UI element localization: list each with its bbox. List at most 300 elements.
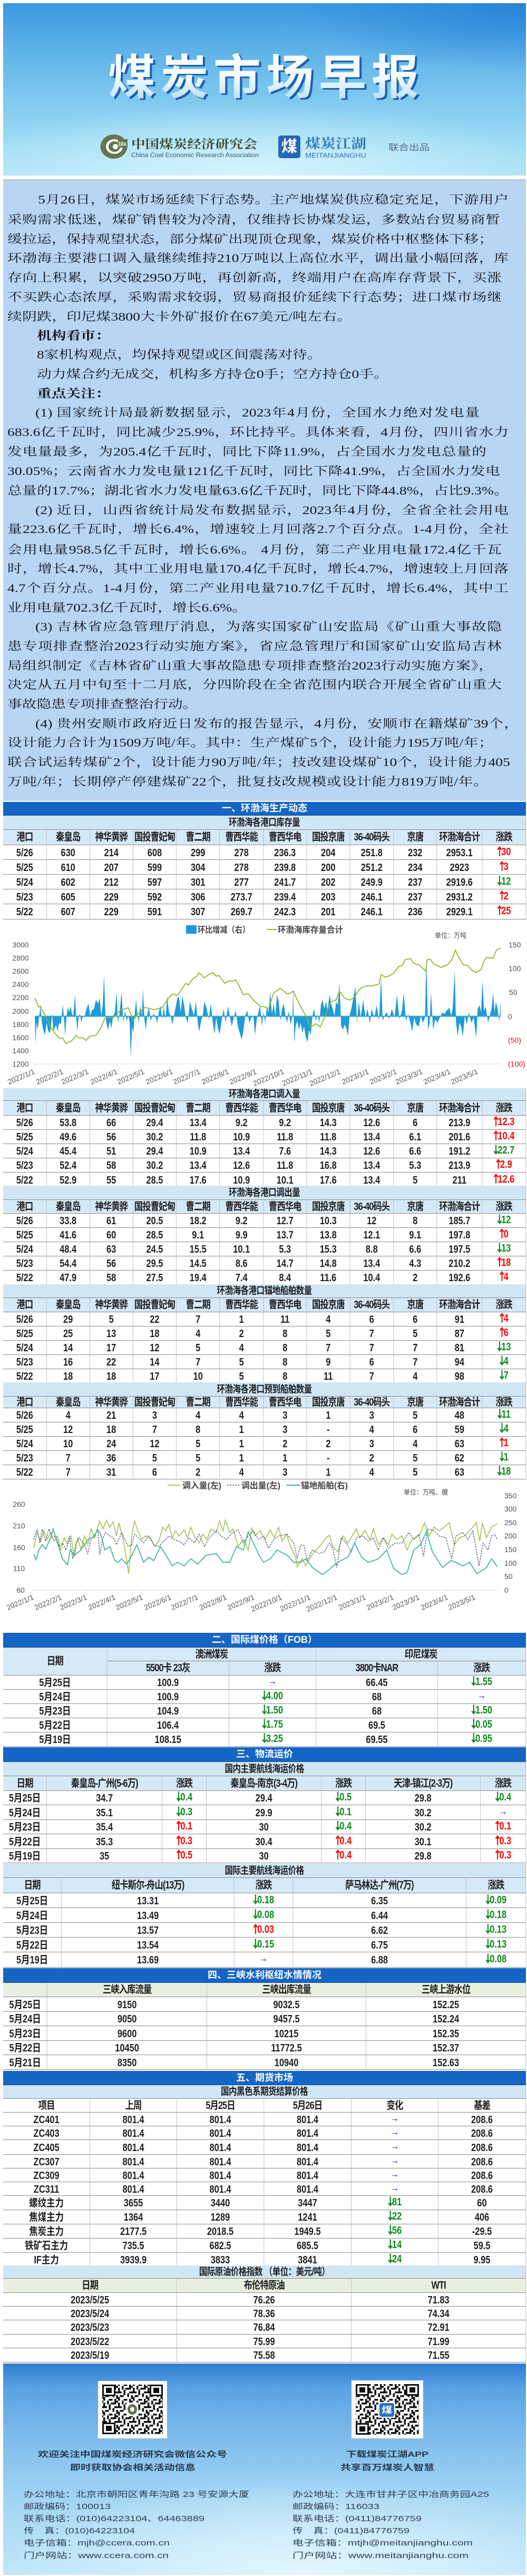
text: institutional views: 机构看市：	[37, 329, 110, 342]
table: expected vessels: 5/26	[16, 1410, 33, 1421]
table: domestic shipping rates: 0.4	[339, 1849, 352, 1861]
table: anchored vessels: 9	[326, 1357, 330, 1368]
section heading: futures market	[3, 2071, 526, 2085]
x axis date labels	[6, 1067, 479, 1088]
table: port outbound volume: 11.6	[320, 1272, 336, 1284]
table: expected vessels: 7	[152, 1424, 157, 1436]
text: association contact details: 联系电话：(010)64223104、64463889	[24, 2514, 204, 2523]
table: anchored vessels: 4	[413, 1371, 417, 1382]
table: international shipping rates: 涨跌	[256, 1880, 271, 1891]
table: port inbound volume: 11.8	[320, 1131, 336, 1143]
table: anchored vessels: 6	[504, 1327, 509, 1339]
table: port inbound volume: 13.4	[190, 1160, 207, 1171]
table: port outbound volume: 10.3	[320, 1215, 337, 1227]
table: port outbound volume: 环渤海各港口调出量	[229, 1187, 300, 1198]
table: international shipping rates: 纽卡斯尔-舟山(13万)	[112, 1880, 184, 1891]
table: anchored vessels: 16	[63, 1357, 73, 1368]
table: international crude oil prices: 76.84	[253, 2322, 275, 2333]
table: port inventory: 597	[148, 876, 162, 888]
left axis labels: 2400	[12, 980, 29, 989]
table: port inbound volume: 36-40码头	[354, 1102, 389, 1113]
table: domestic ferrous futures settlement: 3440	[211, 2197, 230, 2209]
x axis date labels: 2022/4/1	[89, 1067, 119, 1086]
table: anchored vessels: 91	[455, 1314, 464, 1325]
table: international crude oil prices: 75.58	[253, 2350, 275, 2361]
table: expected vessels: 3	[369, 1410, 374, 1421]
x axis date labels: 2023/2/1	[365, 1593, 395, 1612]
table: port outbound volume: 国投曹妃甸	[134, 1201, 175, 1213]
x axis date labels: 2022/3/1	[60, 1067, 90, 1086]
table: FOB prices: 108.15	[155, 1734, 181, 1746]
table: domestic ferrous futures settlement: 801.4	[297, 2114, 318, 2126]
table: expected vessels: 31	[106, 1467, 116, 1478]
table: anchored vessels: 14	[63, 1342, 73, 1354]
table: domestic shipping rates: 29.8	[415, 1793, 432, 1804]
table: anchored vessels: 5	[196, 1342, 200, 1354]
table: expected vessels: 神华黄骅	[95, 1397, 128, 1408]
x axis date labels: 2022/7/1	[172, 1067, 201, 1086]
table: anchored vessels: 11	[280, 1314, 289, 1325]
table: port inbound volume: 神华黄骅	[95, 1102, 128, 1113]
table: anchored vessels: 94	[455, 1357, 464, 1368]
table: international shipping rates	[3, 1864, 526, 1968]
table: port inventory: 242.3	[274, 906, 296, 918]
text: item 3	[7, 620, 502, 711]
table: expected vessels: 12	[150, 1438, 160, 1450]
table: Three Gorges flow and water level: 5月22日	[9, 2042, 41, 2054]
table: international shipping rates: 0.18	[490, 1909, 506, 1920]
table: port outbound volume: 曹西华能	[225, 1201, 258, 1213]
table: domestic ferrous futures settlement: ZC307	[33, 2156, 60, 2168]
table: domestic ferrous futures settlement: IF主力	[34, 2254, 59, 2266]
table: domestic ferrous futures settlement: 国内黑色系期货结算价格	[221, 2086, 308, 2097]
table: domestic ferrous futures settlement: 682.5	[209, 2240, 231, 2252]
table: port outbound volume: 9.1	[409, 1229, 421, 1241]
table: domestic shipping rates: 35.4	[96, 1822, 113, 1833]
table: port inventory: 241.7	[274, 876, 296, 888]
table: port outbound volume: 60	[106, 1229, 116, 1241]
table: port inbound volume: 5.3	[409, 1160, 421, 1171]
table: anchored vessels: 7	[196, 1314, 200, 1325]
table: international shipping rates: 0.13	[490, 1938, 506, 1950]
table: port inventory: 京唐	[407, 831, 423, 843]
table: port inbound volume: 5/26	[16, 1117, 33, 1129]
table: port outbound volume: 5/23	[16, 1258, 33, 1270]
table: port inbound volume: 211	[453, 1175, 466, 1186]
table: FOB prices: 1.75	[266, 1719, 283, 1730]
left axis labels: 160	[13, 1543, 25, 1552]
table: domestic ferrous futures settlement: ZC401	[33, 2114, 60, 2126]
text: item 2: 业用电量702.3亿千瓦时，增长6.6%。	[7, 601, 247, 614]
right axis labels: 200	[504, 1532, 517, 1540]
table: port outbound volume: 14.8	[320, 1258, 337, 1270]
right axis labels	[508, 941, 525, 1068]
table: international shipping rates: 13.31	[137, 1895, 159, 1906]
table: domestic shipping rates: 0.3	[180, 1835, 192, 1846]
table: port outbound volume: 5.3	[279, 1244, 291, 1255]
table: domestic ferrous futures settlement: 801.4	[209, 2114, 231, 2126]
table: port inbound volume: 53.8	[60, 1117, 76, 1129]
text: market summary: 续阴跌，印尼煤3800大卡外矿报价在67美元/吨左右。	[7, 310, 352, 323]
table: port inbound volume: 191.2	[448, 1146, 470, 1157]
left axis labels: 2800	[12, 954, 29, 962]
table: international crude oil prices: 74.34	[428, 2308, 450, 2320]
section heading: Three Gorges water conditions: 四、三峡水利枢纽水情情况	[208, 1970, 321, 1980]
table: domestic ferrous futures settlement: 801.4	[297, 2156, 318, 2168]
table: port inbound volume: 51	[106, 1146, 116, 1157]
table: expected vessels: 4	[369, 1467, 374, 1478]
table: expected vessels: 港口	[16, 1397, 33, 1408]
x axis date labels: 2022/12/1	[308, 1067, 341, 1088]
table: anchored vessels: 国投京唐	[312, 1299, 345, 1311]
text: item 1	[7, 406, 509, 497]
table: port outbound volume: 12.1	[363, 1229, 380, 1241]
text: Meitan Jianghu contact details	[292, 2490, 489, 2560]
x axis date labels: 2023/3/1	[394, 1067, 424, 1086]
section heading: futures market: 五、期货市场	[236, 2073, 293, 2083]
table: domestic shipping rates: 0.3	[499, 1849, 511, 1861]
table: anchored vessels: 6	[413, 1314, 417, 1325]
table: port inbound volume: 29.4	[146, 1117, 163, 1129]
table: domestic ferrous futures settlement: 208.6	[471, 2128, 493, 2139]
table: port inbound volume: 55	[106, 1175, 116, 1186]
table: anchored vessels: 8	[282, 1357, 287, 1368]
table: domestic shipping rates: 34.7	[96, 1793, 113, 1804]
table: port inbound volume: 11.8	[277, 1131, 293, 1143]
table: port outbound volume: 197.8	[448, 1229, 470, 1241]
x axis date labels: 2022/7/1	[170, 1593, 199, 1612]
table: Three Gorges flow and water level: 9150	[118, 1999, 136, 2011]
table: domestic ferrous futures settlement: ZC403	[33, 2128, 60, 2139]
legend: 调入量(左)	[182, 1481, 221, 1490]
table: international shipping rates: 国际主要航线海运价格	[225, 1865, 304, 1876]
left axis labels: 1400	[12, 1047, 29, 1055]
table: port outbound volume: 曹西华电	[269, 1201, 301, 1213]
table: port outbound volume: 41.6	[60, 1229, 76, 1241]
table: port inventory: 神华黄骅	[95, 831, 128, 843]
table: domestic shipping rates: 日期	[17, 1778, 33, 1789]
left axis labels: 2200	[12, 993, 29, 1002]
table: port inventory: 2929.1	[446, 906, 473, 918]
table: port outbound volume: 15.3	[320, 1244, 337, 1255]
table: port outbound volume: 18.2	[190, 1215, 207, 1227]
table: expected vessels: 环渤海各港口预到船舶数量	[217, 1383, 312, 1395]
table: expected vessels: 2	[196, 1467, 200, 1478]
table: port inventory: 201	[321, 906, 335, 918]
section heading: Three Gorges water conditions	[3, 1968, 526, 1983]
table: port inbound volume: 10.1	[277, 1175, 294, 1186]
text: Meitan Jianghu contact details: 邮政编码：116033	[292, 2502, 379, 2511]
table: expected vessels: 24	[106, 1438, 116, 1450]
table: anchored vessels: 7	[326, 1342, 330, 1354]
table: anchored vessels: 1	[239, 1314, 244, 1325]
table: domestic shipping rates: 0.4	[339, 1820, 352, 1832]
table: international crude oil prices: 71.83	[428, 2294, 450, 2306]
table: anchored vessels: 12	[150, 1342, 160, 1354]
table: port inventory: 曹西华电	[269, 831, 301, 843]
table: port inventory: 307	[191, 906, 205, 918]
table: port inventory: 5/24	[16, 876, 33, 888]
table: international shipping rates: →	[259, 1953, 268, 1964]
table: expected vessels: 18	[106, 1424, 116, 1436]
table: international crude oil prices: 72.91	[428, 2322, 450, 2333]
table: expected vessels: 1	[504, 1437, 509, 1449]
text: item 3: (3) 吉林省应急管理厅消息，为落实国家矿山安监局《矿山重大事故隐	[35, 620, 502, 633]
text: item 4: (4) 贵州安顺市政府近日发布的报告显示，4月份，安顺市在籍煤矿39个，	[35, 717, 519, 730]
table: port inventory: 涨跌	[496, 831, 512, 843]
text: market summary: 不买跌心态浓厚，采购需求较弱，贸易商报价延续下行态势；进口煤市场继	[7, 290, 502, 304]
table: domestic ferrous futures settlement: 1241	[298, 2212, 317, 2223]
left axis labels	[12, 941, 29, 1068]
table: international shipping rates: 0.08	[490, 1953, 506, 1965]
table: port inbound volume: 12.3	[497, 1116, 514, 1128]
table: FOB prices: 3.25	[266, 1733, 283, 1745]
table: port outbound volume: 13.8	[320, 1229, 337, 1241]
x axis date labels: 2022/11/1	[281, 1067, 314, 1088]
table: port inventory: 200	[321, 861, 335, 873]
left axis labels: 110	[13, 1564, 25, 1573]
right axis labels: 0	[508, 1012, 512, 1021]
table: port inbound volume: 曹二期	[186, 1102, 210, 1113]
text: association contact details: 电子信箱：mjh@ccera.com.cn	[24, 2539, 170, 2548]
table: domestic shipping rates: 29.4	[256, 1793, 272, 1804]
title: 煤炭市场早报	[110, 41, 421, 109]
table: expected vessels: 曹西华能	[225, 1397, 258, 1408]
table: expected vessels: 5/25	[16, 1424, 33, 1436]
right axis labels: 100	[504, 1559, 517, 1567]
table: port outbound volume: 54.4	[60, 1258, 76, 1270]
table: FOB prices: 日期	[47, 1655, 63, 1667]
table: expected vessels: 8	[196, 1424, 200, 1436]
table: domestic shipping rates: 5月25日	[9, 1793, 41, 1804]
table: port outbound volume: 国投京唐	[312, 1201, 345, 1213]
table: port inventory: 269.7	[231, 906, 252, 918]
table: Three Gorges flow and water level: 三峡出库流量	[262, 1984, 311, 1996]
table: anchored vessels: 5	[109, 1314, 114, 1325]
x axis date labels: 2022/9/1	[226, 1593, 256, 1612]
table: international shipping rates: 涨跌	[488, 1880, 504, 1891]
table: domestic shipping rates: 30.1	[415, 1836, 432, 1847]
table: port outbound volume: 8.4	[279, 1272, 291, 1284]
table: port outbound volume: 6.6	[409, 1244, 421, 1255]
text: association contact details: 邮政编码：100013	[24, 2502, 111, 2511]
bars: daily change	[35, 948, 501, 1058]
table: port inbound volume: 秦皇岛	[56, 1102, 80, 1113]
table: port inbound volume: 6.6	[409, 1146, 421, 1157]
table: expected vessels: -	[327, 1424, 330, 1436]
table: expected vessels: 7	[66, 1467, 71, 1478]
table: anchored vessels: 18	[150, 1328, 160, 1340]
table: port inbound volume: 12.6	[363, 1117, 380, 1129]
section heading: international coal prices: 二、国际煤价格（FOB）	[212, 1634, 317, 1645]
table: Three Gorges flow and water level: 10450	[115, 2042, 139, 2054]
table: port outbound volume: 9.2	[236, 1215, 248, 1227]
table: port inbound volume: 6.1	[409, 1131, 421, 1143]
table: FOB prices: 0.05	[475, 1719, 492, 1730]
table: port inventory: 214	[104, 847, 119, 858]
table: port inventory: 229	[104, 906, 119, 918]
table: Three Gorges flow and water level: 三峡上游水位	[422, 1984, 470, 1996]
table: port inventory: 30	[501, 846, 511, 857]
table: anchored vessels: 10	[193, 1371, 203, 1382]
table: expected vessels: 5	[413, 1467, 417, 1478]
table: Three Gorges flow and water level: 9457.5	[273, 2013, 300, 2025]
table: expected vessels: 2	[282, 1438, 287, 1450]
table: port inbound volume: 17.6	[190, 1175, 207, 1186]
table: anchored vessels: 5	[326, 1328, 330, 1340]
table: domestic shipping rates: 5月22日	[9, 1836, 41, 1847]
table: domestic ferrous futures settlement: 3841	[298, 2254, 317, 2266]
table: port inventory: 239.4	[274, 891, 296, 903]
table: domestic ferrous futures settlement: 801.4	[122, 2142, 144, 2153]
table: expected vessels: 曹西华电	[269, 1397, 301, 1408]
right axis labels: 250	[504, 1518, 517, 1527]
table: anchored vessels: 4	[504, 1313, 509, 1324]
table: domestic shipping rates: 0.3	[180, 1806, 192, 1818]
table: Three Gorges flow and water level: 10215	[275, 2028, 298, 2039]
text: association contact details: 传 真：(010)64223104	[24, 2526, 135, 2535]
table: international crude oil prices	[3, 2265, 526, 2362]
table: international shipping rates: 0.15	[257, 1938, 274, 1950]
table: international shipping rates: 5月22日	[16, 1939, 48, 1951]
table: port inventory: 251.2	[361, 861, 383, 873]
table: port inventory: 273.7	[231, 891, 252, 903]
table: Three Gorges flow and water level: 三峡入库流量	[103, 1984, 151, 1996]
table: domestic ferrous futures settlement: 801.4	[122, 2184, 144, 2195]
table: port inventory: 599	[148, 861, 162, 873]
table: anchored vessels: 7	[413, 1342, 417, 1354]
table: domestic ferrous futures settlement	[3, 2085, 526, 2267]
table: domestic shipping rates: 涨跌	[495, 1778, 511, 1789]
text: Meitan Jianghu contact details: 联系电话：(0411)84776759	[292, 2514, 422, 2523]
table: port inbound volume: 213.9	[448, 1160, 470, 1171]
table: port outbound volume: 28.5	[146, 1229, 163, 1241]
table: port inventory: 610	[61, 861, 75, 873]
text: market summary: 环渤海主要港口调入量继续维持210万吨以上高位水平，调出量小幅回落，库	[7, 251, 509, 265]
table: port inbound volume: 22.7	[497, 1145, 514, 1156]
table: port inventory: 306	[191, 891, 205, 903]
table: expected vessels: 21	[106, 1410, 116, 1421]
table: expected vessels: 涨跌	[496, 1397, 512, 1408]
text: item 1: 总量的17.7%；湖北省水力发电量63.6亿千瓦时，同比下降44.8%，占比9.3%。	[7, 484, 509, 497]
table: port outbound volume: 19.4	[190, 1272, 207, 1284]
table: international crude oil prices: 日期	[82, 2280, 98, 2291]
table: FOB prices: 3800卡NAR	[356, 1662, 398, 1674]
table: port inventory: 630	[61, 847, 75, 858]
text: item 4: 联合试运转煤矿2个，设计能力90万吨/年；技改建设煤矿10个，设计能力405	[7, 756, 510, 769]
table: international crude oil prices: 2023/5/23	[71, 2322, 109, 2333]
table: anchored vessels: 曹西华能	[225, 1299, 258, 1311]
table: domestic ferrous futures settlement: 焦煤主力	[29, 2212, 64, 2223]
table: port outbound volume: 10.4	[363, 1272, 380, 1284]
table: domestic ferrous futures settlement: 208.6	[471, 2114, 493, 2126]
table: Three Gorges flow and water level	[3, 1983, 526, 2070]
table: domestic shipping rates: 涨跌	[335, 1778, 352, 1789]
table: port inbound volume: 10.9	[233, 1175, 250, 1186]
section heading: logistics freight	[3, 1747, 526, 1762]
table: anchored vessels: 京唐	[407, 1299, 423, 1311]
table: international crude oil prices: 71.99	[428, 2336, 450, 2347]
table: FOB prices: 5月23日	[39, 1706, 71, 1717]
table: international crude oil prices: 76.26	[253, 2294, 275, 2306]
text: follow the association: 欢迎关注中国煤炭经济研究会微信公众号	[38, 2449, 227, 2459]
table: expected vessels: 63	[455, 1467, 464, 1478]
table: anchored vessels: 13	[106, 1328, 116, 1340]
table: anchored vessels: 5/22	[16, 1371, 33, 1382]
table: anchored vessels: 7	[369, 1328, 374, 1340]
table: port inventory	[3, 816, 526, 919]
table: port inventory: 278	[235, 861, 249, 873]
table: port inbound volume: 国投京唐	[312, 1102, 345, 1113]
section heading: Bohai Rim production: 一、环渤海生产动态	[222, 803, 307, 814]
table: anchored vessels: 7	[369, 1342, 374, 1354]
x axis date labels: 2022/5/1	[114, 1593, 144, 1612]
table: port inbound volume: 12.6	[233, 1160, 250, 1171]
table: anchored vessels: 神华黄骅	[95, 1299, 128, 1311]
table: anchored vessels: 8	[282, 1371, 287, 1382]
table: domestic ferrous futures settlement: 208.6	[471, 2142, 493, 2153]
x axis date labels: 2023/2/1	[368, 1067, 398, 1086]
text: market summary: 5月26日，煤炭市场延续下行态势。主产地煤炭供应稳定充足，下游用户	[38, 193, 509, 206]
table: port inbound volume: 5/24	[16, 1146, 33, 1157]
x axis date labels: 2023/1/1	[337, 1593, 367, 1612]
table: domestic ferrous futures settlement: 801.4	[122, 2128, 144, 2139]
left axis labels: 1800	[12, 1020, 29, 1029]
QR code: Meitan Jianghu app: 煤	[382, 2405, 392, 2415]
table: anchored vessels: 18	[63, 1371, 73, 1382]
text: association contact details: 门户网站：www.ccera.com.cn	[24, 2551, 169, 2560]
text: Meitan Jianghu contact details: 办公地址：大连市甘井子区中冶商务园A25	[292, 2490, 489, 2499]
table: domestic ferrous futures settlement: 801.4	[209, 2142, 231, 2153]
table: port inventory: 608	[148, 847, 162, 858]
table: international shipping rates: 13.54	[137, 1939, 159, 1951]
table: domestic shipping rates: 30.2	[415, 1822, 432, 1833]
table: port outbound volume: 港口	[16, 1201, 33, 1213]
table: port inventory: 204	[321, 847, 335, 858]
text: association contact details: 办公地址：北京市朝阳区青年沟路 23 号安源大厦	[24, 2490, 249, 2499]
x axis date labels: 2022/8/1	[200, 1067, 230, 1086]
table: anchored vessels: 22	[106, 1357, 116, 1368]
table: port inbound volume: 12.6	[497, 1174, 514, 1185]
chart: Bohai Rim inventory and daily change	[6, 925, 525, 1088]
QR code: Meitan Jianghu app	[352, 2380, 423, 2438]
table: FOB prices: 100.9	[157, 1691, 179, 1703]
table: anchored vessels: 港口	[16, 1299, 33, 1311]
table: port outbound volume: 29.5	[146, 1258, 163, 1270]
table: expected vessels: 1	[504, 1451, 509, 1463]
legend: 环渤海库存量合计	[278, 925, 343, 935]
table: domestic ferrous futures settlement: 801.4	[297, 2128, 318, 2139]
table: domestic ferrous futures settlement: 801.4	[209, 2156, 231, 2168]
table: anchored vessels: 5/25	[16, 1328, 33, 1340]
table: port outbound volume: 15.5	[190, 1244, 207, 1255]
table: port inventory: 3	[504, 860, 509, 872]
table: expected vessels: 3	[369, 1438, 374, 1450]
table: port inventory: 607	[61, 906, 75, 918]
table: domestic shipping rates: 秦皇岛-广州(5-6万)	[71, 1778, 138, 1789]
table: Three Gorges flow and water level: 5月23日	[9, 2028, 41, 2039]
table: expected vessels: 4	[504, 1423, 509, 1435]
table: domestic ferrous futures settlement: 3939.9	[120, 2254, 147, 2266]
table: expected vessels: 秦皇岛	[56, 1397, 80, 1408]
table: port outbound volume: 61	[106, 1215, 116, 1227]
left axis labels: 1600	[12, 1033, 29, 1042]
table: port inventory: 5/22	[16, 906, 33, 918]
table: FOB prices: 5月19日	[39, 1734, 71, 1746]
text: item 4	[7, 717, 519, 788]
table: port inbound volume: 13.4	[363, 1160, 380, 1171]
chart: inbound, outbound and anchored vessels	[5, 1480, 517, 1613]
